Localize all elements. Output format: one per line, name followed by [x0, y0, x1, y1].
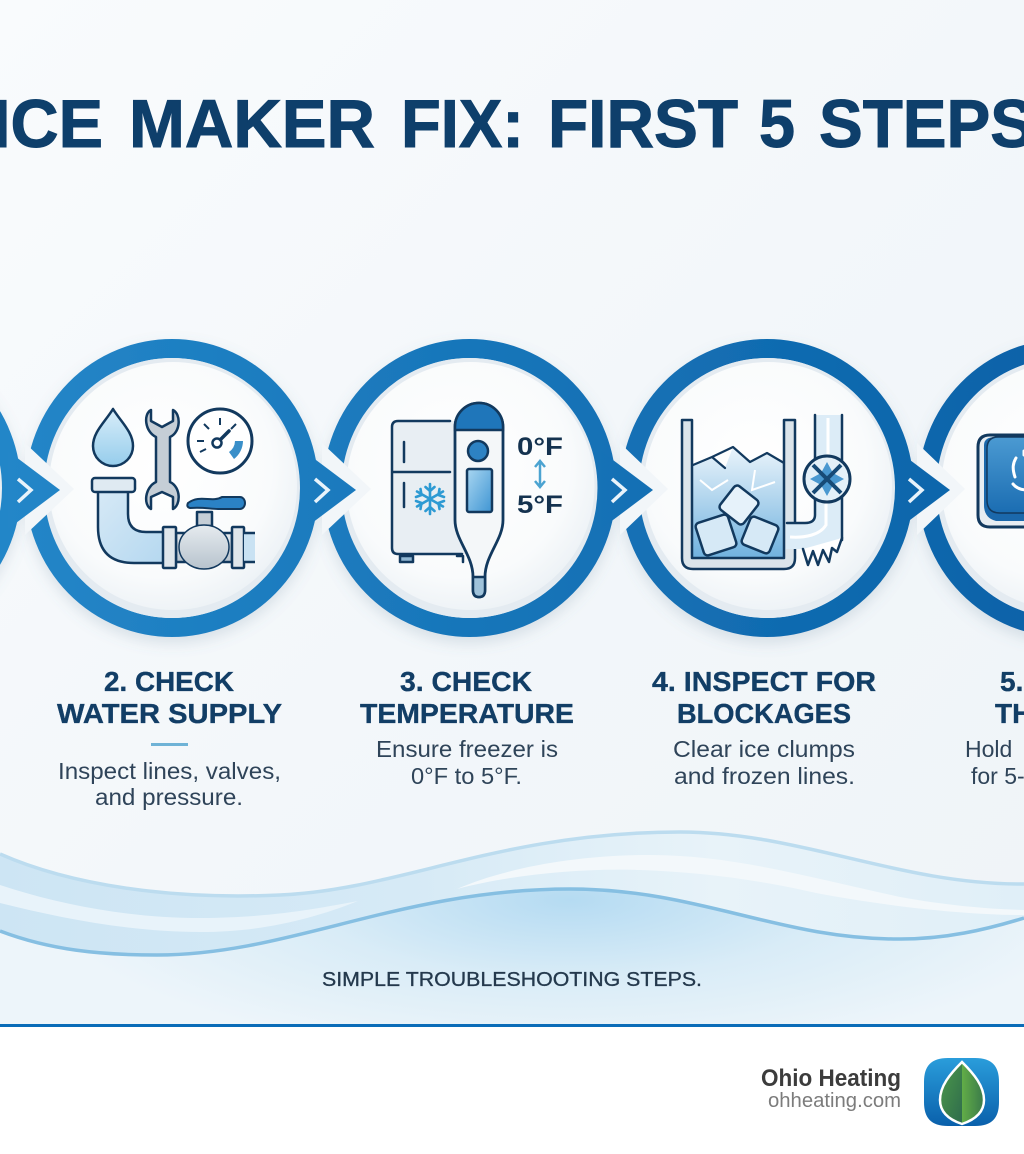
heading: step 3: TEMPERATURE	[360, 698, 574, 729]
heading: step 4	[652, 666, 876, 729]
description: step 3	[376, 736, 558, 789]
title: 5	[759, 86, 795, 162]
icon: fridge and thermometer	[392, 403, 563, 597]
arrow: step 2 to step 3	[304, 451, 356, 529]
arrow: step 1 to step 2	[8, 451, 60, 529]
description: step 3: Ensure freezer is	[376, 736, 558, 762]
text: step 5 (cropped): for 5-	[971, 763, 1024, 789]
icon: water drop	[93, 409, 133, 466]
arrow: step 3 to step 4	[601, 451, 653, 529]
text: step 4	[652, 666, 876, 789]
description: step 4: and frozen lines.	[674, 763, 855, 789]
description: step 3: 0°F to 5°F.	[411, 763, 522, 789]
icon: ice fill	[692, 447, 784, 559]
text: step 5 (cropped)	[965, 666, 1024, 789]
panel: step 3 circle	[304, 348, 606, 628]
icon: water supply	[92, 409, 255, 569]
heading: step 2: 2. CHECK	[104, 666, 234, 697]
description: step 2: and pressure.	[95, 784, 243, 810]
icon: valve	[163, 497, 255, 569]
icon: pressure gauge	[188, 409, 252, 473]
panel: step 2 circle	[8, 348, 309, 628]
description: step 4	[673, 736, 855, 789]
text: step 5 (cropped): 5.	[1000, 666, 1023, 697]
description: step 2: Inspect lines, valves,	[58, 758, 281, 784]
icon: reset button	[978, 435, 1024, 527]
description: step 4: Clear ice clumps	[673, 736, 855, 762]
panel: step 5 circle (cropped)	[898, 348, 1024, 628]
panel: step 4 circle	[601, 348, 904, 628]
icon: fridge	[392, 421, 470, 562]
footer band	[0, 1024, 1024, 1154]
icon: bin	[682, 420, 795, 569]
text: temperature range: 0°F	[517, 433, 563, 461]
heading: step 2	[57, 666, 282, 729]
heading: step 3	[360, 666, 574, 729]
text: step 5 (cropped): Hold	[965, 736, 1012, 762]
title: MAKER	[129, 86, 375, 162]
icon: ice cubes	[695, 484, 780, 556]
icon: wrench	[146, 410, 179, 509]
panel: step 1 circle (cropped)	[0, 348, 12, 628]
icon: pipe elbow	[92, 478, 164, 563]
icon: ice bin with blocked line	[682, 415, 850, 569]
text: step 3	[360, 666, 574, 789]
icon: logo	[924, 1058, 999, 1126]
heading: step 4: 4. INSPECT FOR	[652, 666, 876, 697]
text: step 2	[57, 666, 282, 810]
arrow: step 4 to step 5	[898, 451, 950, 529]
title: FIX:	[401, 86, 524, 162]
caption: SIMPLE TROUBLESHOOTING STEPS.	[322, 969, 702, 991]
icon: frozen pipe	[786, 415, 842, 565]
title: FIRST	[548, 86, 738, 162]
brand name	[761, 1065, 901, 1112]
heading: step 4: BLOCKAGES	[677, 698, 851, 729]
icon: snowflake	[416, 484, 444, 514]
brand name: ohheating.com	[768, 1090, 901, 1112]
text: temperature range: 5°F	[517, 491, 563, 519]
icon: thermometer	[455, 403, 503, 597]
wave band decoration	[0, 832, 1024, 1024]
brand name: Ohio Heating	[761, 1065, 901, 1092]
text: temperature range	[517, 433, 563, 519]
heading: step 3: 3. CHECK	[400, 666, 532, 697]
heading: step 2: WATER SUPPLY	[57, 698, 282, 729]
icon: blockage X	[804, 456, 850, 502]
description: step 2	[58, 758, 281, 810]
